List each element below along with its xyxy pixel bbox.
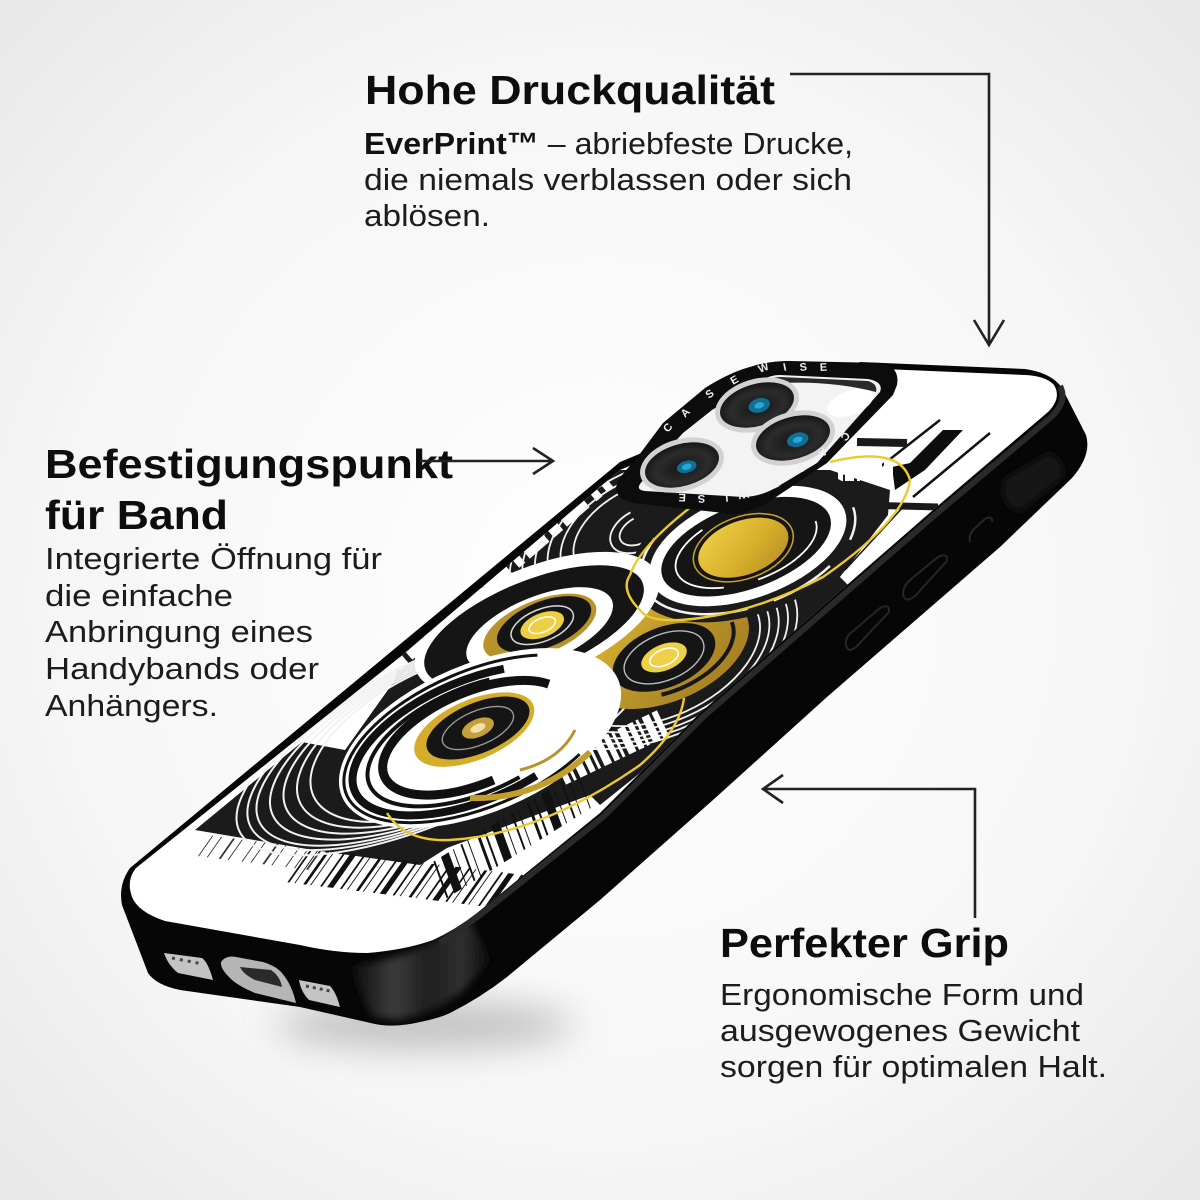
body text: Handybands oder: [45, 651, 319, 686]
ring: gold middle right: [594, 608, 749, 709]
heading: Perfekter Grip: [720, 920, 1009, 966]
arrow: [763, 775, 975, 918]
thin gold circles: [387, 456, 910, 840]
heading: Hohe Druckqualität: [365, 67, 775, 113]
lens: top: [708, 368, 806, 442]
side buttons: [846, 452, 1064, 650]
callout: grip: [720, 775, 1107, 1084]
brush streaks bottom left: [200, 846, 533, 894]
phone shadow: [275, 1001, 575, 1049]
body text: die einfache: [45, 578, 233, 613]
glass top shadow: [760, 377, 876, 392]
gold swooshes: [470, 752, 590, 798]
ring: upper left disc: [414, 552, 658, 682]
body text: [720, 977, 1107, 1084]
body text: Anhängers.: [45, 688, 218, 723]
brand text upper: CASEWISE: [661, 361, 827, 435]
side bevel: [440, 386, 1062, 943]
arrow: [790, 74, 1004, 345]
glass highlight: [823, 384, 877, 422]
body text: sorgen für optimalen Halt.: [720, 1049, 1107, 1084]
concentric line rings, lower left: [236, 660, 626, 856]
body text: Ergonomische Form und: [720, 977, 1084, 1012]
ring: top gold disc: [636, 479, 856, 622]
body text: ausgewogenes Gewicht: [720, 1013, 1080, 1048]
brush streaks along upper edge: [398, 480, 614, 670]
left speaker: [164, 953, 213, 980]
heading: [45, 441, 453, 538]
white brush wedge right: [840, 570, 845, 577]
body text: die niemals verblassen oder sich: [364, 162, 852, 197]
body text: EverPrint™ – abriebfeste Drucke,: [364, 126, 853, 161]
lower corner highlight: [352, 920, 490, 1020]
callout: print quality: [364, 67, 1004, 345]
case body: [121, 362, 1087, 1026]
lens: right: [744, 401, 842, 475]
brand text lower: CASEWISE: [678, 429, 852, 504]
concentric line rings, lower right: [593, 599, 798, 750]
heading: für Band: [45, 492, 228, 538]
dark artwork field: [195, 470, 890, 865]
phone case: [100, 350, 1100, 1026]
ring: large lower disc: [338, 648, 622, 828]
right speaker: [299, 980, 340, 1007]
body text: Anbringung eines: [45, 614, 313, 649]
body text: [364, 126, 853, 233]
bottom ports: [164, 953, 340, 1007]
camera surround: [616, 361, 897, 514]
arrow: [420, 448, 553, 474]
back panel: [130, 369, 1057, 953]
body text: Integrierte Öffnung für: [45, 541, 382, 576]
concentric line rings, upper left: [496, 472, 642, 580]
heading: Befestigungspunkt: [45, 441, 453, 487]
brushed upper bars: [892, 430, 963, 490]
white lattice lower right: [560, 722, 665, 772]
camera glass plate: [639, 375, 881, 497]
charging port: [221, 957, 296, 1003]
brush streaks bottom right: [440, 790, 584, 880]
body text: ablösen.: [364, 198, 490, 233]
callout: strap attachment: [45, 441, 553, 723]
body text: [45, 541, 382, 723]
lens: left: [633, 428, 731, 502]
